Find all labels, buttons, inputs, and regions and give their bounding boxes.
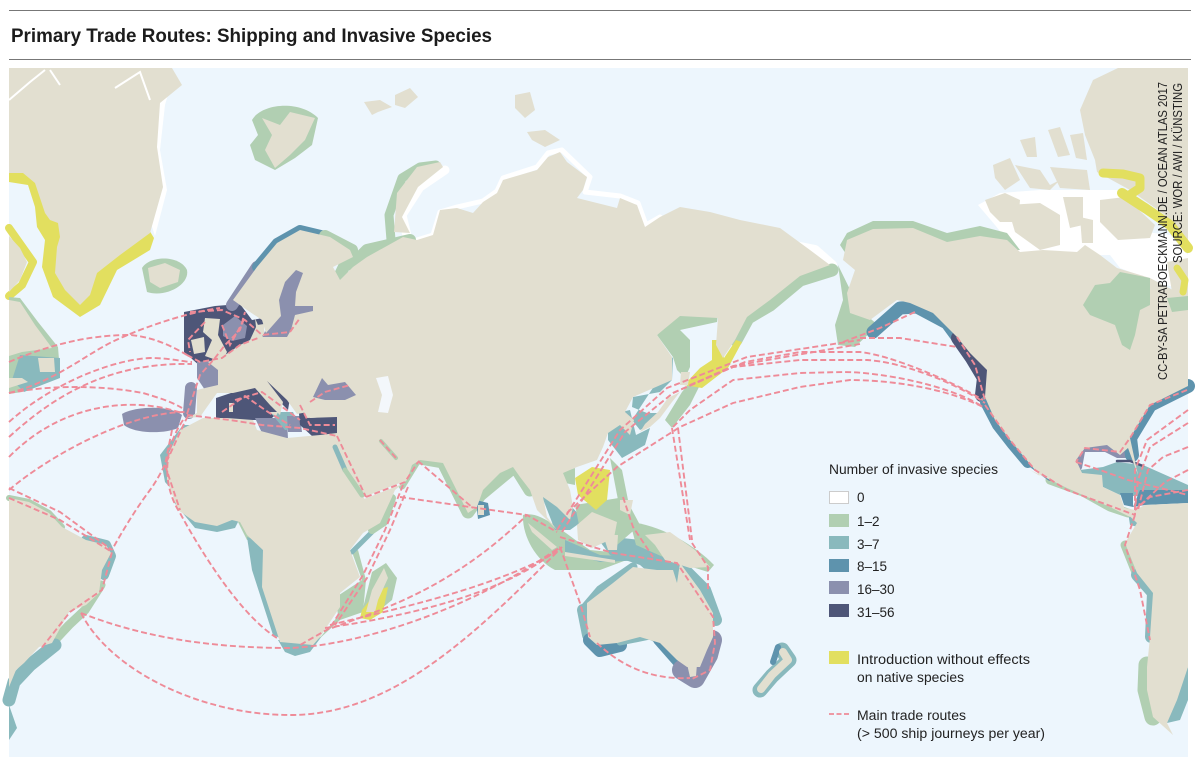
islands: UK, Iceland, Svalbard and others — [142, 88, 713, 677]
main trade routes — [9, 308, 1188, 715]
shelf: Alaska and west coast of the Americas — [835, 221, 1153, 717]
legend item: 8-15: 8–15 — [857, 559, 887, 574]
land: Canadian Arctic islands — [985, 68, 1188, 298]
legend item: 3-7 — [829, 536, 880, 552]
legend item: 31-56: 31–56 — [857, 605, 895, 620]
legend item: introduction without effects — [829, 651, 1030, 685]
legend — [829, 462, 1045, 741]
legend item: 3-7: 3–7 — [857, 537, 880, 552]
land: Labrador and Newfoundland at left edge — [9, 300, 55, 388]
land: Greenland — [9, 68, 182, 305]
shelf: arctic Russia and Novaya Zemlya — [389, 165, 832, 378]
Great Lakes and Hudson Strait shelf — [1167, 296, 1188, 312]
legend item: main trade routes: (> 500 ship journeys per year) — [857, 726, 1045, 741]
legend item: 0 — [830, 490, 865, 505]
land: South America at right edge — [1120, 503, 1188, 735]
land: Eurasia and Africa — [167, 152, 830, 645]
shelf: European seas — [122, 230, 410, 439]
legend item: main trade routes — [829, 708, 1045, 741]
shelf: Africa and Arabia — [160, 425, 397, 656]
legend item: 31-56 — [829, 604, 895, 620]
legend item: 0: 0 — [857, 490, 865, 505]
legend item: introduction without effects: on native species — [857, 670, 964, 685]
land: Baffin side at left edge — [9, 236, 27, 292]
greenland ice channels — [9, 70, 150, 100]
land: North America — [843, 228, 1188, 517]
shelf: East Asia — [600, 340, 742, 458]
legend item: 16-30: 16–30 — [857, 582, 895, 597]
Red Sea, Gulf of Aden, Black Sea, Persian Gulf and Caspian — [313, 376, 405, 498]
shelf: eastern South America at left edge — [9, 498, 111, 740]
source credit: CC-BY-SA PETRABOECKMANN.DE / OCEAN ATLAS 2017 — [1156, 82, 1170, 380]
shelf: Atlantic North America — [9, 297, 60, 394]
shelf: Caribbean, Gulf and US east coast — [1073, 352, 1188, 723]
legend item: 16-30 — [829, 581, 895, 597]
legend item: main trade routes: Main trade routes — [857, 708, 966, 723]
land: South America at left edge — [9, 498, 111, 687]
arctic ice zones — [140, 68, 1188, 290]
shelf: South and Southeast Asia — [402, 458, 716, 678]
legend item: 1-2 — [829, 514, 880, 529]
legend item: 1-2: 1–2 — [857, 514, 880, 529]
legend item: 8-15 — [829, 559, 887, 574]
New Zealand — [760, 647, 789, 690]
Hudson Bay shelf — [1083, 272, 1150, 350]
legend heading: Number of invasive species — [829, 462, 998, 477]
yellow fringe in the Canadian Arctic — [1103, 173, 1188, 292]
legend item: introduction without effects: Introduction without effects — [857, 652, 1030, 667]
title: Primary Trade Routes: Shipping and Invasive Species — [11, 25, 492, 47]
shelf: yellow fringe on Greenland and Baffin — [9, 150, 154, 317]
source credit: SOURCE: WOR / AWI / KÜNSTING — [1171, 83, 1185, 263]
source credit — [1156, 82, 1185, 380]
